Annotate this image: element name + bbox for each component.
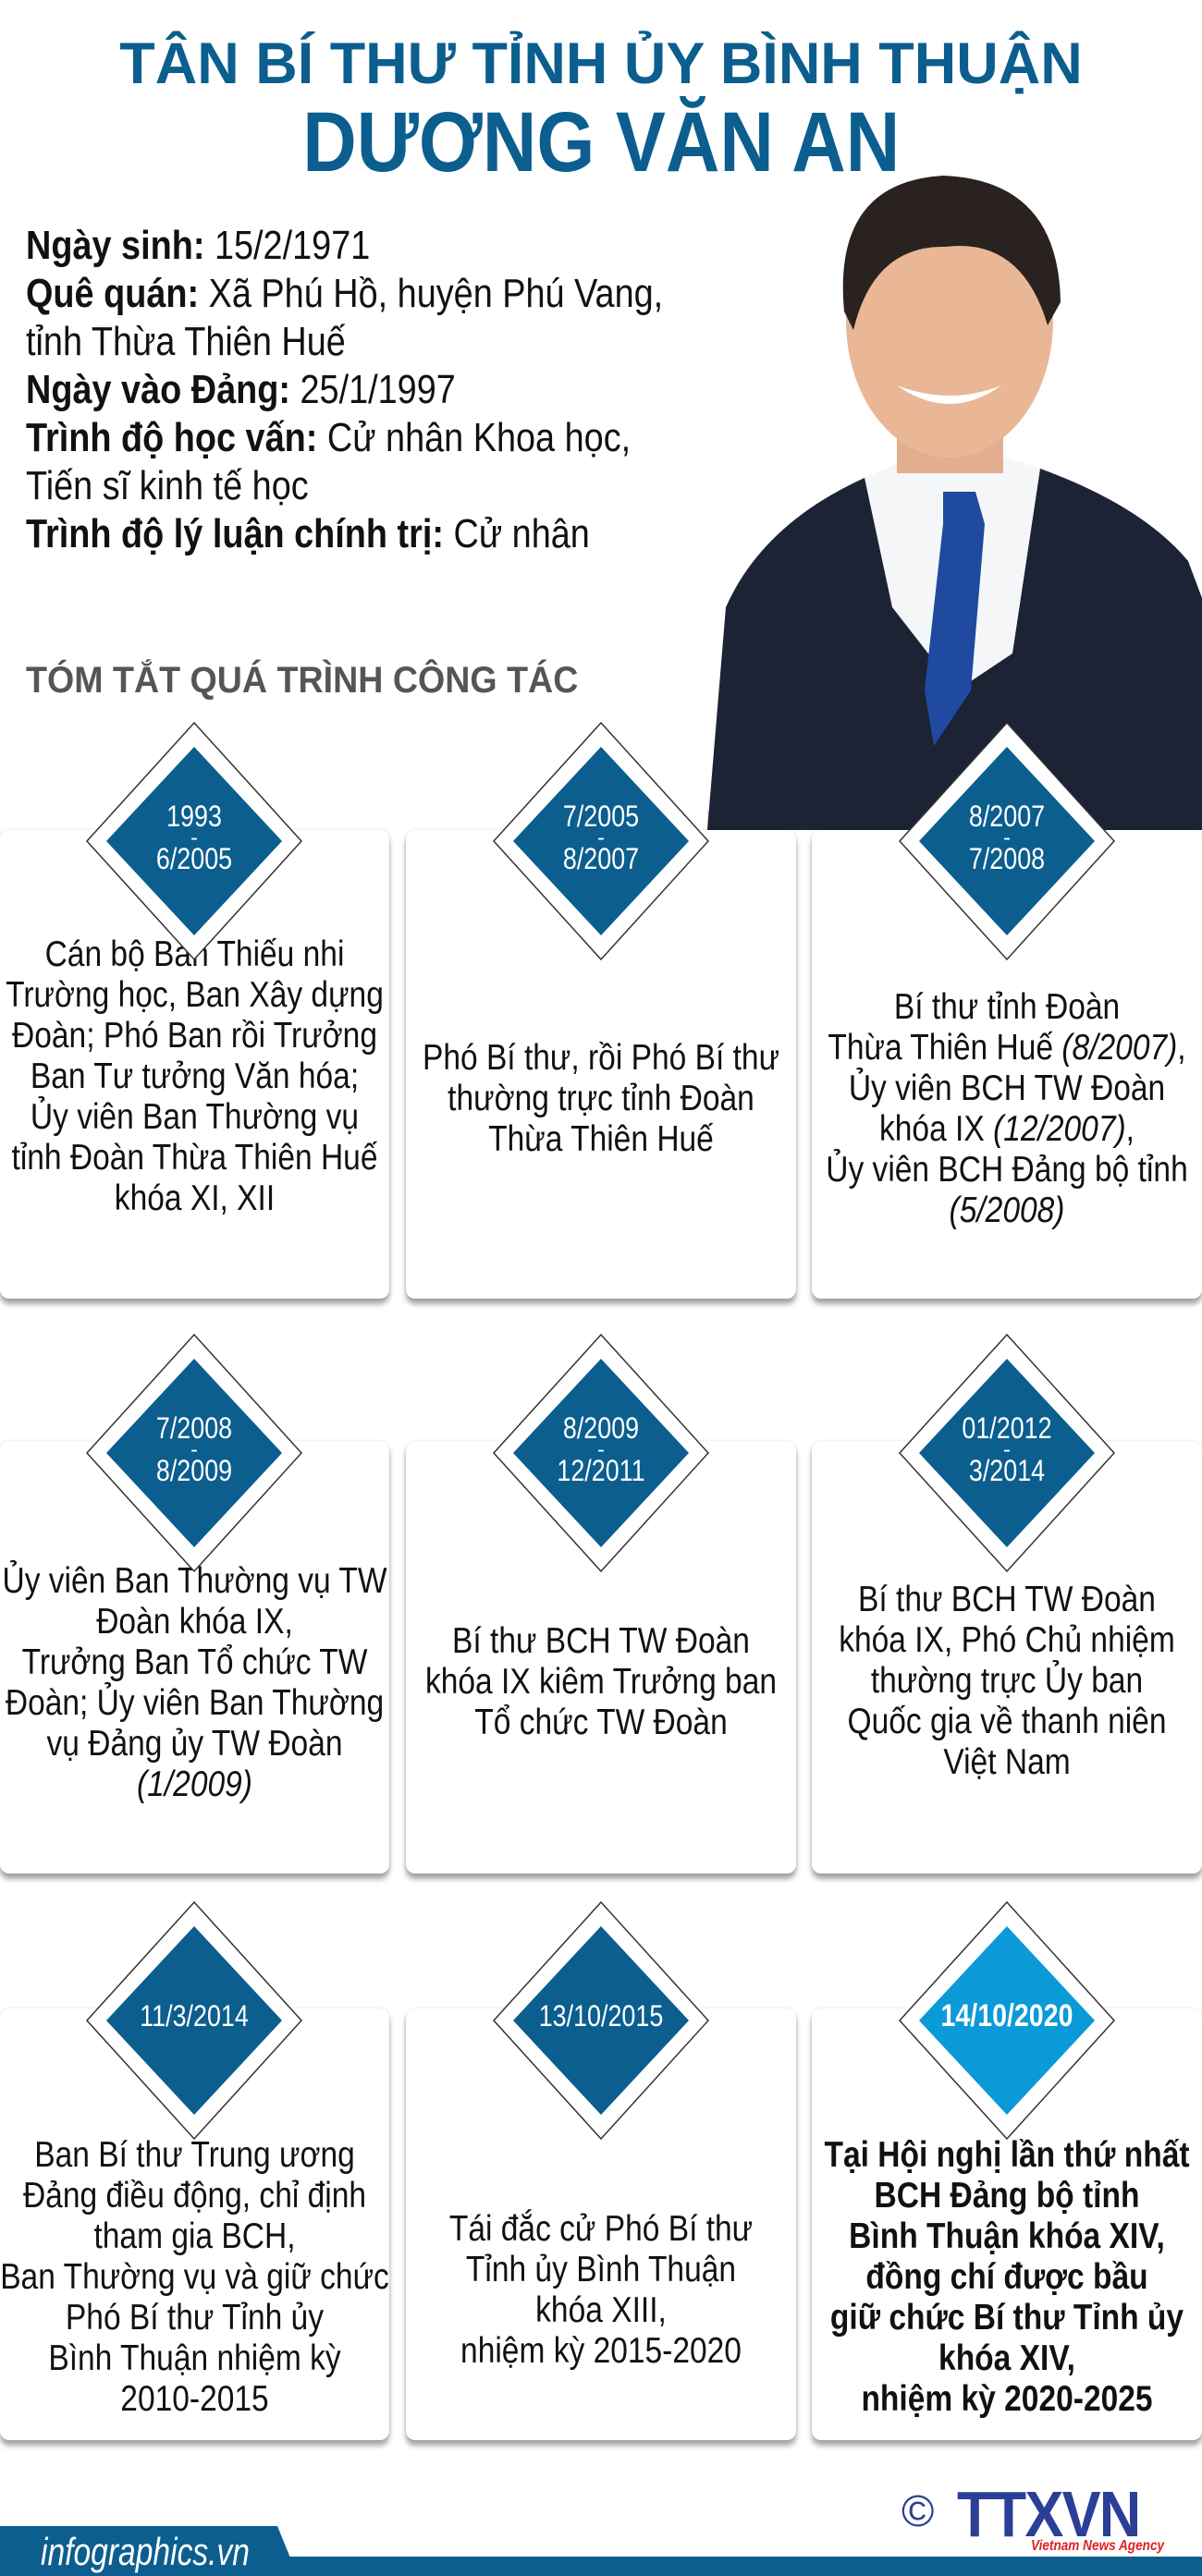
info block: Quê quán: Xã Phú Hồ, huyện Phú Vang,	[26, 271, 663, 316]
card 7: tham gia BCH,	[93, 2216, 296, 2256]
diamond 6	[899, 1334, 1115, 1572]
card 1: Đoàn; Phó Ban rồi Trưởng	[12, 1016, 377, 1056]
diamond 1	[86, 722, 302, 960]
diamond 4: 7/2008	[156, 1411, 232, 1445]
diamond 4: 8/2009	[156, 1454, 232, 1487]
card 6	[812, 1441, 1202, 1874]
info block: tỉnh Thừa Thiên Huế	[26, 319, 346, 364]
diamond 5: 8/2009	[563, 1411, 639, 1445]
card 2: thường trực tỉnh Đoàn	[448, 1079, 754, 1118]
diamond 3: -	[1003, 825, 1011, 850]
section heading: TÓM TẮT QUÁ TRÌNH CÔNG TÁC	[26, 660, 578, 701]
info block: Ngày vào Đảng: 25/1/1997	[26, 367, 456, 412]
diamond 9 highlight: 14/10/2020	[941, 1998, 1073, 2033]
diamond 1: 1993	[166, 800, 222, 833]
diamond 2	[493, 722, 709, 960]
card 3: (5/2008)	[950, 1190, 1064, 1230]
card 7	[0, 2008, 389, 2440]
card 4: Trưởng Ban Tổ chức TW	[22, 1642, 367, 1682]
logo: TTXVN: Vietnam News Agency	[1031, 2538, 1164, 2554]
card 7: 2010-2015	[120, 2379, 269, 2419]
diamond 6: 01/2012	[962, 1411, 1052, 1445]
diamond 1: -	[190, 825, 198, 850]
card 2: Phó Bí thư, rồi Phó Bí thư	[423, 1038, 779, 1078]
card 9: đồng chí được bầu	[865, 2257, 1148, 2297]
card 4: vụ Đảng ủy TW Đoàn	[46, 1724, 343, 1764]
card 4: Đoàn khóa IX,	[96, 1602, 293, 1642]
info block: Ngày sinh: 15/2/1971	[26, 223, 370, 268]
footer tab: infographics.vn	[0, 2526, 298, 2576]
diamond 7: 11/3/2014	[140, 1999, 249, 2033]
card 4: Đoàn; Ủy viên Ban Thường	[6, 1683, 384, 1723]
card 3: khóa IX (12/2007),	[879, 1109, 1135, 1149]
title line 2: DƯƠNG VĂN AN	[302, 95, 900, 189]
card 9: khóa XIV,	[938, 2338, 1075, 2378]
card 5: khóa IX kiêm Trưởng ban	[425, 1662, 777, 1702]
card 1: khóa XI, XII	[115, 1178, 275, 1218]
card 1: Ủy viên Ban Thường vụ	[31, 1097, 359, 1137]
card 7: Bình Thuận nhiệm kỳ	[48, 2338, 341, 2378]
info block: Trình độ học vấn: Cử nhân Khoa học,	[26, 415, 631, 460]
footer band	[0, 2557, 1202, 2576]
card 5: Tổ chức TW Đoàn	[474, 1703, 728, 1742]
card 1: Trường học, Ban Xây dựng	[6, 975, 384, 1015]
card 1: tỉnh Đoàn Thừa Thiên Huế	[11, 1138, 378, 1178]
diamond 3: 8/2007	[969, 800, 1045, 833]
card 3: Ủy viên BCH Đảng bộ tỉnh	[826, 1150, 1188, 1190]
card 9: nhiệm kỳ 2020-2025	[861, 2379, 1153, 2419]
diamond 4: -	[190, 1437, 198, 1462]
card 7: Ban Thường vụ và giữ chức	[0, 2257, 389, 2297]
diamond 3: 7/2008	[969, 842, 1045, 875]
card 9: giữ chức Bí thư Tỉnh ủy	[830, 2298, 1184, 2338]
diamond 5: -	[597, 1437, 605, 1462]
diamond 8: 13/10/2015	[539, 1999, 663, 2033]
diamond 8	[493, 1901, 709, 2140]
card 3: Bí thư tỉnh Đoàn	[894, 987, 1120, 1027]
info block	[26, 223, 663, 556]
card 6: thường trực Ủy ban	[871, 1661, 1143, 1701]
card 6: Việt Nam	[943, 1742, 1071, 1782]
diamond 1: 6/2005	[156, 842, 232, 875]
card 6: Quốc gia về thanh niên	[848, 1702, 1166, 1741]
diamond 3	[899, 722, 1115, 960]
card 2: Thừa Thiên Huế	[488, 1119, 714, 1159]
diamond 2: 7/2005	[563, 800, 639, 833]
card 9: Bình Thuận khóa XIV,	[849, 2216, 1165, 2256]
info block: Trình độ lý luận chính trị: Cử nhân	[26, 511, 590, 556]
card 3: Thừa Thiên Huế (8/2007),	[828, 1028, 1186, 1068]
card 7: Phó Bí thư Tỉnh ủy	[66, 2298, 324, 2338]
title line 1: TÂN BÍ THƯ TỈNH ỦY BÌNH THUẬN	[119, 31, 1083, 96]
card 2	[406, 830, 796, 1299]
card 1: Ban Tư tưởng Văn hóa;	[31, 1056, 359, 1096]
card 1	[0, 830, 389, 1299]
logo: TTXVN: ©	[902, 2487, 934, 2536]
card 4: (1/2009)	[137, 1764, 252, 1804]
card 5	[406, 1441, 796, 1874]
card 8: Tỉnh ủy Bình Thuận	[466, 2250, 736, 2289]
card 9: BCH Đảng bộ tỉnh	[875, 2176, 1139, 2216]
card 3: Ủy viên BCH TW Đoàn	[849, 1068, 1165, 1108]
logo: TTXVN: TTXVN	[957, 2478, 1140, 2550]
card 6: Bí thư BCH TW Đoàn	[858, 1580, 1156, 1619]
card 8: khóa XIII,	[535, 2290, 667, 2330]
info block: Tiến sĩ kinh tế học	[26, 463, 309, 508]
diamond 9 highlight	[899, 1901, 1115, 2140]
card 7: Ban Bí thư Trung ương	[34, 2135, 355, 2175]
card 6: khóa IX, Phó Chủ nhiệm	[839, 1620, 1175, 1660]
diamond 2: 8/2007	[563, 842, 639, 875]
card 3	[812, 830, 1202, 1299]
diamond 4	[86, 1334, 302, 1572]
card 1: Cán bộ Ban Thiếu nhi	[45, 934, 344, 974]
card 4: Ủy viên Ban Thường vụ TW	[2, 1561, 387, 1601]
diamond 7	[86, 1901, 302, 2140]
card 5: Bí thư BCH TW Đoàn	[452, 1621, 750, 1661]
card 8	[406, 2008, 796, 2440]
card 8: nhiệm kỳ 2015-2020	[460, 2331, 742, 2371]
footer tab: infographics.vn: infographics.vn	[41, 2530, 250, 2573]
diamond 2: -	[597, 825, 605, 850]
diamond 5: 12/2011	[557, 1454, 645, 1487]
card 7: Đảng điều động, chỉ định	[23, 2176, 366, 2216]
diamond 6: 3/2014	[969, 1454, 1045, 1487]
portrait photo	[707, 176, 1202, 830]
card 9	[812, 2008, 1202, 2440]
card 4	[0, 1441, 389, 1874]
diamond 6: -	[1003, 1437, 1011, 1462]
diamond 5	[493, 1334, 709, 1572]
card 9: Tại Hội nghị lần thứ nhất	[824, 2135, 1190, 2175]
card 8: Tái đắc cử Phó Bí thư	[449, 2209, 753, 2249]
logo: TTXVN	[902, 2478, 1165, 2554]
